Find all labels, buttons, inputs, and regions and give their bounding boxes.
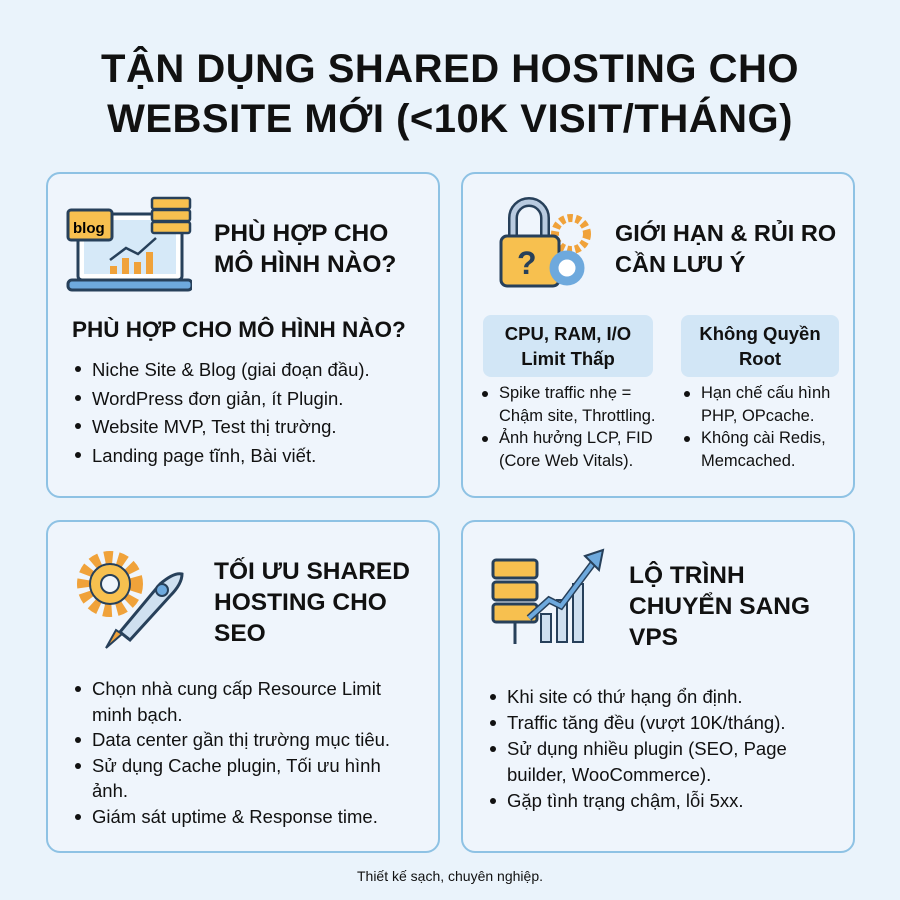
icon: lock with gears bbox=[500, 197, 591, 288]
heading: SEO bbox=[214, 620, 266, 647]
bullets left: Spike traffic nhẹ = bbox=[499, 384, 631, 402]
bullets right: Hạn chế cấu hình bbox=[701, 384, 830, 402]
icon: gear and rocket bbox=[77, 551, 184, 649]
icon: laptop blog: blog bbox=[73, 220, 105, 237]
bullet list: Data center gần thị trường mục tiêu. bbox=[92, 729, 390, 750]
icon: lock with gears: ? bbox=[517, 245, 537, 281]
bullet list: Khi site có thứ hạng ổn định. bbox=[507, 686, 743, 707]
bullet list bbox=[75, 359, 370, 466]
heading: MÔ HÌNH NÀO? bbox=[214, 251, 396, 278]
bullet list bbox=[75, 678, 390, 827]
title: TẬN DỤNG SHARED HOSTING CHO bbox=[101, 47, 799, 91]
bullet list: builder, WooCommerce). bbox=[507, 764, 711, 785]
icon: server with growth chart bbox=[492, 548, 604, 644]
heading: CHUYỂN SANG bbox=[629, 593, 810, 620]
panel: optimize bbox=[46, 520, 440, 853]
heading bbox=[214, 557, 410, 647]
heading: HOSTING CHO bbox=[214, 589, 387, 616]
bullet list: ảnh. bbox=[92, 780, 128, 801]
bullet list: Landing page tĩnh, Bài viết. bbox=[92, 444, 316, 466]
heading bbox=[214, 219, 396, 278]
bullets right: Không cài Redis, bbox=[701, 429, 826, 447]
bullets left: Ảnh hưởng LCP, FID bbox=[499, 429, 653, 447]
heading bbox=[615, 220, 836, 277]
panel: limits and risks bbox=[461, 172, 855, 498]
tag: root bbox=[681, 315, 839, 377]
tag: root: Root bbox=[739, 348, 781, 369]
bullets left bbox=[482, 384, 656, 470]
title: WEBSITE MỚI (<10K VISIT/THÁNG) bbox=[107, 97, 793, 141]
icon: laptop blog bbox=[66, 196, 192, 292]
bullet list: Gặp tình trạng chậm, lỗi 5xx. bbox=[507, 790, 744, 811]
footer: Thiết kế sạch, chuyên nghiệp. bbox=[357, 868, 543, 884]
heading: LỘ TRÌNH bbox=[629, 562, 745, 589]
subheading: PHÙ HỢP CHO MÔ HÌNH NÀO? bbox=[72, 317, 406, 342]
bullet list: Chọn nhà cung cấp Resource Limit bbox=[92, 678, 381, 699]
bullets left: (Core Web Vitals). bbox=[499, 452, 633, 470]
heading bbox=[629, 561, 810, 651]
panel: suitable models bbox=[46, 172, 440, 498]
bullet list bbox=[490, 686, 787, 811]
bullet list: Giám sát uptime & Response time. bbox=[92, 806, 378, 826]
bullet list: Sử dụng Cache plugin, Tối ưu hình bbox=[92, 754, 381, 776]
bullets right: PHP, OPcache. bbox=[701, 406, 814, 424]
panel: roadmap to VPS bbox=[461, 520, 855, 853]
bullets right: Memcached. bbox=[701, 452, 795, 470]
bullets right bbox=[684, 384, 830, 470]
bullet list: Website MVP, Test thị trường. bbox=[92, 416, 337, 437]
heading: GIỚI HẠN & RỦI RO bbox=[615, 220, 836, 246]
title bbox=[101, 46, 799, 141]
heading: CẦN LƯU Ý bbox=[615, 251, 745, 277]
tag: root: Không Quyền bbox=[699, 323, 821, 344]
heading: PHÙ HỢP CHO bbox=[214, 220, 388, 247]
bullet list: minh bạch. bbox=[92, 704, 182, 724]
bullet list: WordPress đơn giản, ít Plugin. bbox=[92, 388, 343, 408]
bullets left: Chậm site, Throttling. bbox=[499, 406, 656, 424]
tag: cpu: CPU, RAM, I/O bbox=[505, 323, 631, 344]
bullet list: Sử dụng nhiều plugin (SEO, Page bbox=[507, 738, 787, 759]
bullet list: Traffic tăng đều (vượt 10K/tháng). bbox=[507, 712, 786, 733]
bullet list: Niche Site & Blog (giai đoạn đầu). bbox=[92, 359, 370, 380]
heading: TỐI ƯU SHARED bbox=[214, 558, 410, 585]
heading: VPS bbox=[629, 624, 678, 651]
tag: cpu: Limit Thấp bbox=[521, 348, 615, 369]
tag: cpu bbox=[483, 315, 653, 377]
